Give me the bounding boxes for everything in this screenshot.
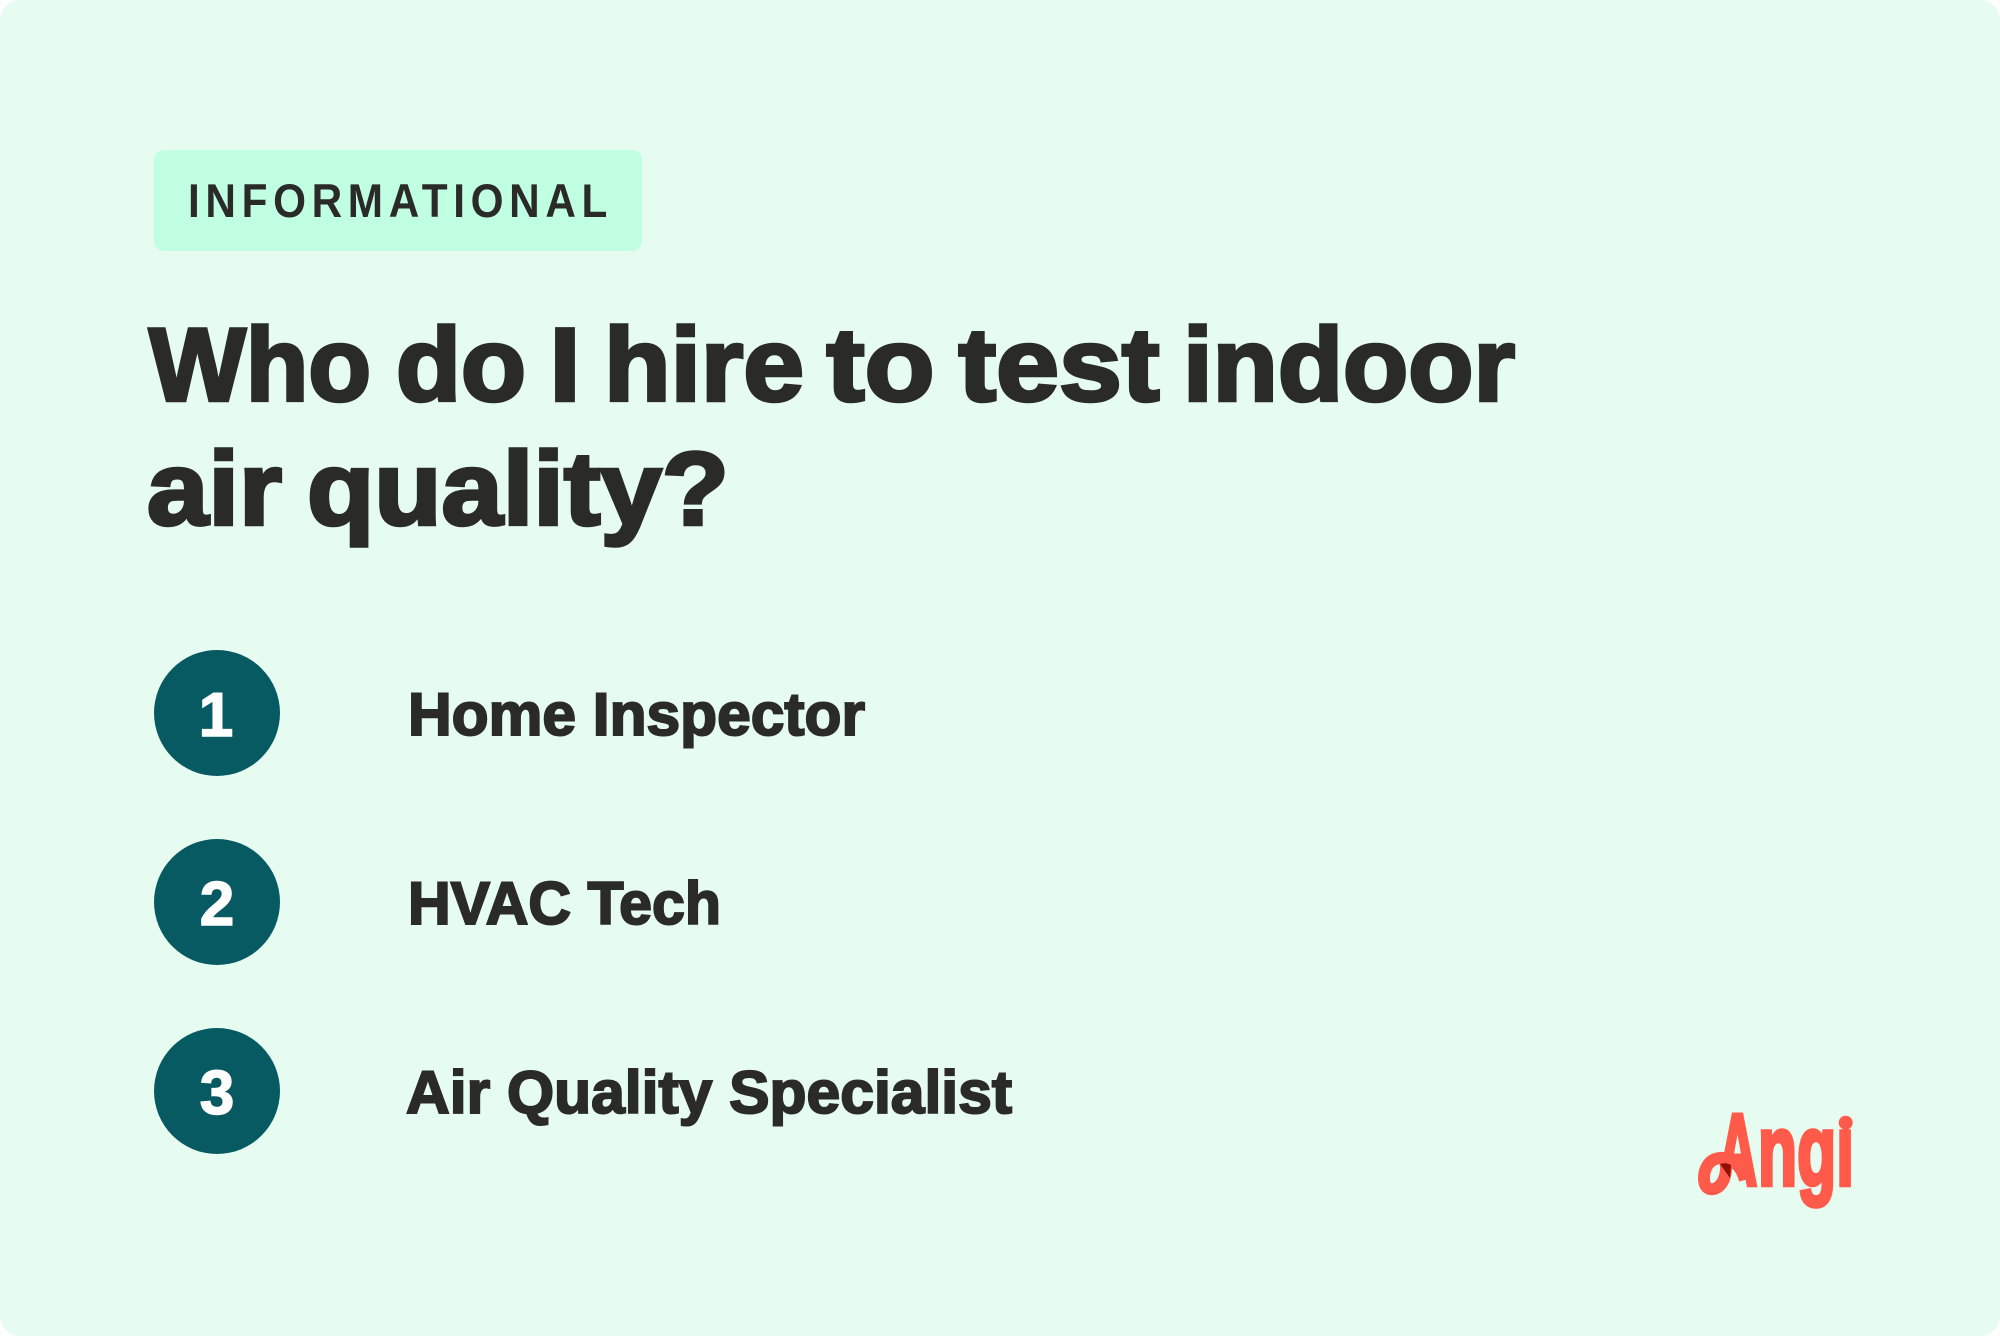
tag: informational (154, 150, 642, 251)
number badge 3: 3 (200, 1059, 234, 1128)
number badge 2 (154, 839, 280, 965)
logo: angi (1704, 1095, 1858, 1207)
label: air quality specialist: Air Quality Specialist (406, 1059, 1012, 1126)
number badge 2: 2 (200, 870, 234, 939)
list item 3: air quality specialist (154, 1028, 1012, 1154)
title: quality? (307, 432, 729, 548)
list item 2: hvac tech (154, 839, 721, 965)
title (147, 308, 1515, 548)
logo: angi: ngi (1758, 1095, 1854, 1207)
label: home inspector: Home Inspector (408, 681, 865, 748)
title: indoor (1183, 308, 1515, 424)
number badge 1: 1 (199, 681, 233, 750)
title: air (147, 432, 282, 548)
number badge 1 (154, 650, 280, 776)
label: hvac tech: HVAC Tech (408, 870, 721, 937)
title: Who (149, 308, 371, 424)
title: I (550, 308, 580, 424)
logo: angi: A (1718, 1095, 1757, 1207)
title: test (958, 308, 1160, 424)
tag: informational: INFORMATIONAL (188, 176, 607, 228)
list item 1: home inspector (154, 650, 865, 776)
title: hire (604, 308, 804, 424)
title: do (396, 308, 526, 424)
title: to (826, 308, 934, 424)
number badge 3 (154, 1028, 280, 1154)
